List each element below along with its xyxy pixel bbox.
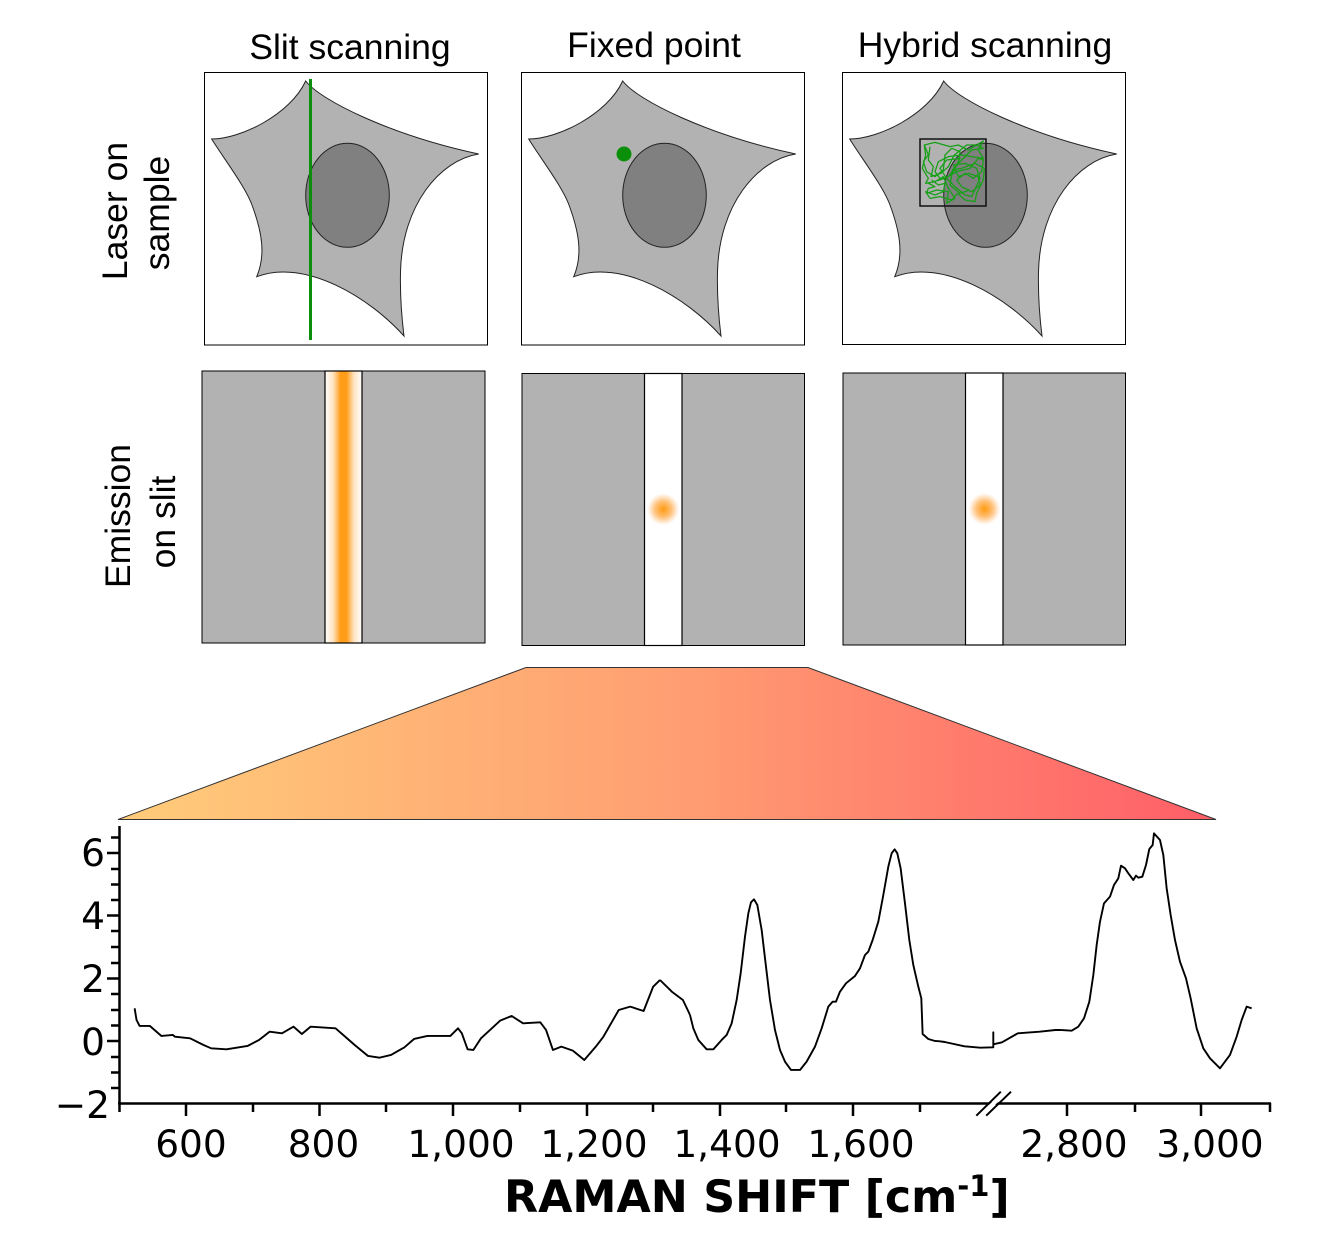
- panel: fixed point sample: [522, 72, 804, 345]
- spectrometer dispersion trapezoid: [118, 668, 1216, 820]
- y axis: [107, 826, 120, 1104]
- panel: slit scanning emission: [202, 371, 485, 643]
- icon: laser spot: [616, 146, 632, 162]
- icon: emission spot: [968, 493, 1000, 525]
- panel: hybrid scanning sample: [842, 72, 1126, 344]
- x axis title: RAMAN SHIFT [cm: [504, 1172, 957, 1223]
- icon: cell: [850, 81, 1117, 336]
- x axis title: ]: [989, 1172, 1010, 1223]
- x axis labels: 600: [155, 1122, 227, 1166]
- panel: slit scanning sample: [204, 72, 488, 345]
- y axis labels: −2: [55, 1083, 110, 1127]
- icon: emission spot: [647, 493, 679, 525]
- icon: nucleus: [944, 143, 1027, 247]
- slit: [644, 374, 682, 646]
- panel: fixed point emission: [522, 374, 804, 646]
- row label: laser on sample: sample: [137, 156, 177, 270]
- heading: hybrid scanning: Hybrid scanning: [858, 25, 1112, 65]
- x axis labels: 2,800: [1020, 1122, 1128, 1166]
- x axis labels: [155, 1122, 1264, 1166]
- x axis labels: 1,400: [673, 1122, 781, 1166]
- row label: emission on slit: on slit: [143, 476, 183, 568]
- x axis labels: 1,000: [407, 1122, 515, 1166]
- panel: hybrid scanning emission: [843, 373, 1126, 645]
- spectrum line: [135, 833, 1252, 1070]
- y axis labels: 2: [81, 957, 105, 1001]
- x axis labels: 800: [288, 1122, 359, 1166]
- icon: emission line: [325, 371, 362, 643]
- x axis labels: 1,600: [807, 1122, 915, 1166]
- x axis title: -1: [957, 1169, 989, 1203]
- slit: [966, 373, 1003, 645]
- icon: scan box: [920, 139, 986, 206]
- row label: emission on slit: Emission: [98, 444, 138, 588]
- heading: fixed point: Fixed point: [567, 25, 741, 65]
- y axis labels: 0: [81, 1020, 105, 1064]
- axis break: [976, 1092, 1011, 1116]
- icon: cell: [529, 81, 796, 336]
- y axis labels: [55, 831, 110, 1127]
- row label: laser on sample: Laser on: [95, 142, 135, 280]
- row label: emission on slit: [98, 444, 183, 588]
- icon: cell: [212, 81, 479, 336]
- icon: nucleus: [306, 143, 389, 247]
- heading: slit scanning: Slit scanning: [249, 27, 451, 67]
- x axis labels: 1,200: [540, 1122, 648, 1166]
- icon: laser line: [309, 79, 312, 340]
- x axis labels: 3,000: [1156, 1122, 1264, 1166]
- y axis labels: 6: [81, 831, 105, 875]
- row label: laser on sample: [95, 142, 177, 280]
- chart: raman spectrum: [55, 826, 1271, 1166]
- y axis labels: 4: [81, 894, 105, 938]
- icon: nucleus: [623, 143, 706, 247]
- icon: scan trajectory: [922, 141, 984, 203]
- x axis: [118, 1103, 1271, 1116]
